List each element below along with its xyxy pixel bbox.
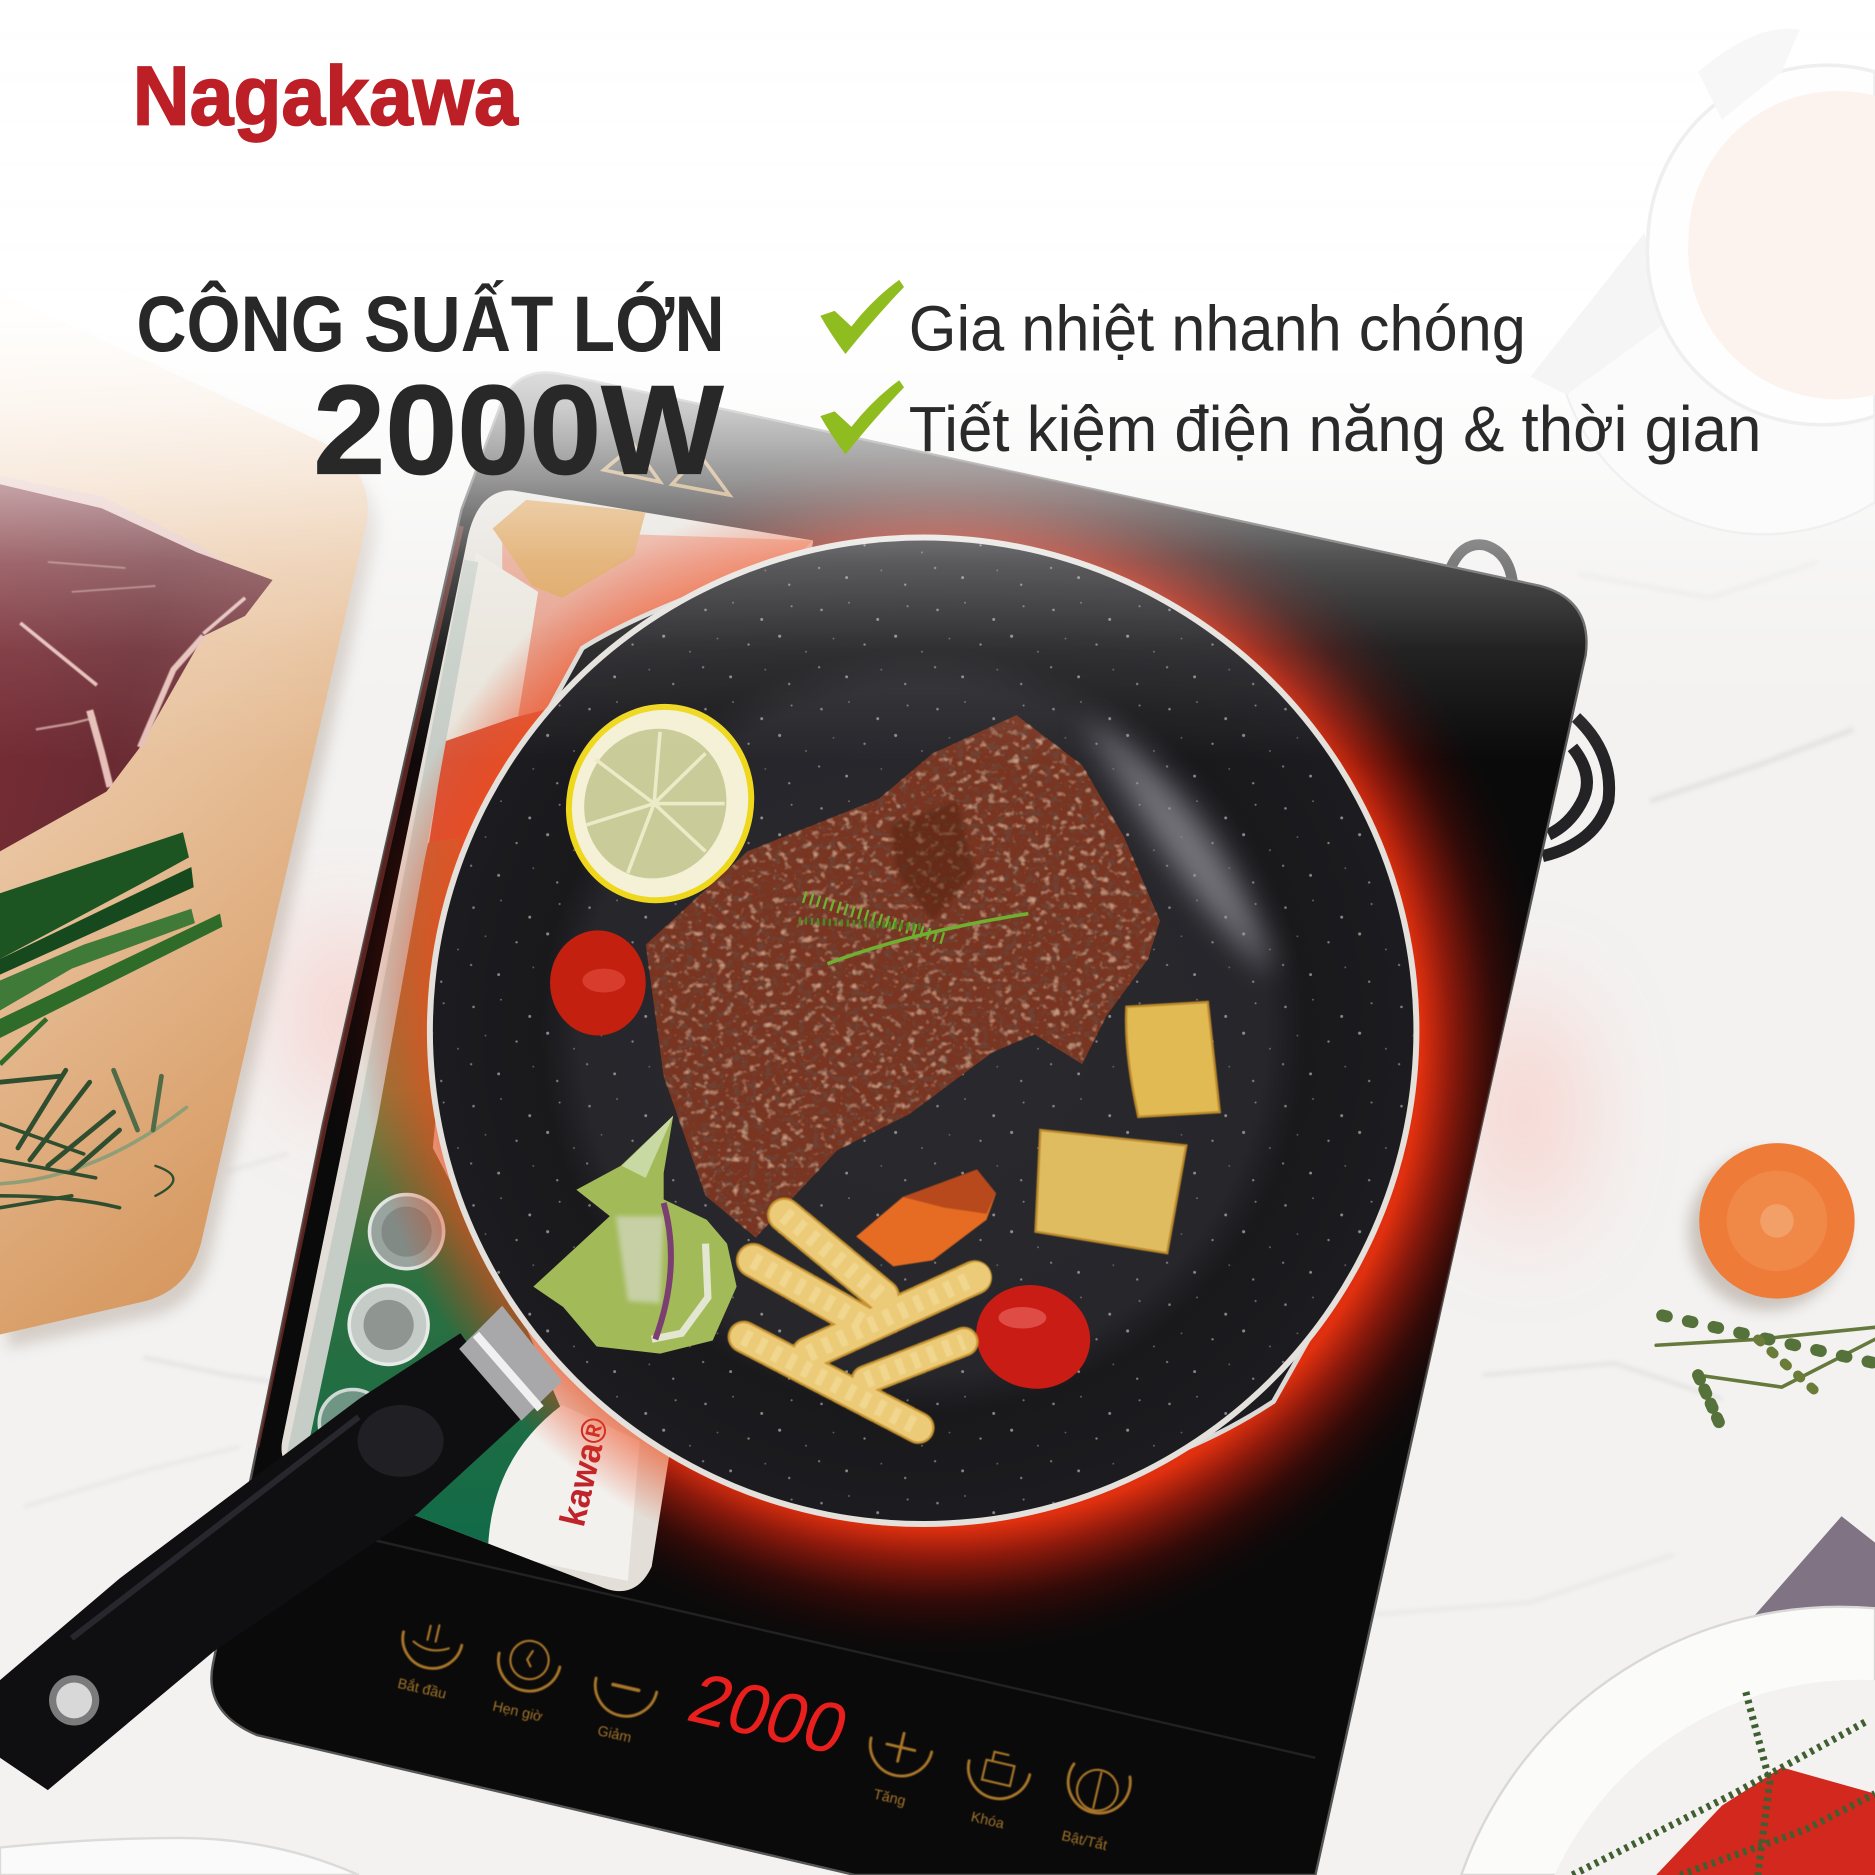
cloth napkin (1740, 1516, 1875, 1632)
control button labels: Giảm (596, 1723, 633, 1746)
control button labels: Hẹn giờ (491, 1699, 544, 1726)
soft red glow on table (304, 921, 1572, 1232)
plate, bottom left (0, 1838, 359, 1875)
warning icons (604, 445, 729, 495)
control button labels: Bắt đầu (396, 1675, 448, 1703)
plate with food, bottom right (1461, 1607, 1875, 1875)
red LED display: 2000 (678, 1660, 859, 1770)
orange squash (493, 500, 646, 598)
salmon (502, 530, 813, 717)
hanging hook (1449, 545, 1513, 584)
potato pieces (1036, 1002, 1220, 1253)
icon: green check (820, 380, 904, 454)
glossy highlight (1082, 717, 1274, 975)
french fries (744, 1215, 976, 1428)
rosemary on board (0, 1070, 187, 1208)
control button icons (397, 1618, 1132, 1819)
cooktop body (211, 373, 1586, 1875)
heading: power (136, 279, 725, 501)
benefit 2 (820, 380, 1761, 465)
logo: Nagakawa: Nagakawa (133, 48, 519, 142)
induction cooktop (211, 373, 1609, 1875)
rim glow over picture (366, 522, 813, 1521)
benefit text: Gia nhiệt nhanh chóng (909, 292, 1526, 364)
pan handle (0, 1306, 562, 1790)
icon: green check (820, 280, 904, 354)
control button labels: Bật/Tắt (1060, 1827, 1109, 1854)
thyme sprig (1656, 1315, 1875, 1429)
control button labels (396, 1675, 1109, 1854)
green onions (0, 832, 222, 1064)
olive to green band (295, 837, 562, 1555)
salad (533, 1116, 737, 1354)
cherry tomato, right (964, 1272, 1102, 1401)
steak (646, 715, 1160, 1238)
cup and saucer (1531, 29, 1875, 534)
control button labels: Tăng (872, 1787, 907, 1810)
control knobs in picture (369, 1195, 444, 1269)
benefit text: Tiết kiệm điện năng & thời gian (909, 393, 1761, 465)
heating glow (257, 435, 1549, 1758)
lemon slice (538, 677, 782, 930)
hanging hole (49, 1675, 99, 1726)
pan body (427, 535, 1419, 1527)
pour spouts (526, 586, 741, 751)
cutting board (0, 293, 377, 1349)
carrot piece (856, 1169, 996, 1266)
benefit 1 (820, 280, 1526, 364)
carrot slice (1688, 1143, 1855, 1311)
cheese blocks (502, 569, 538, 718)
heading line 2: 2000W (313, 359, 724, 501)
rosemary garnish (799, 897, 1028, 964)
cherry tomato, left (550, 930, 646, 1036)
raw beef (0, 476, 273, 851)
maroon strip on left side (257, 526, 462, 1447)
heading line 1: CÔNG SUẤT LỚN (136, 279, 725, 368)
control button labels: Khóa (969, 1809, 1006, 1832)
control panel (396, 1618, 1132, 1854)
brand on picture: kawa® (552, 1414, 616, 1530)
power cable (1543, 717, 1609, 856)
red chili (429, 710, 544, 855)
product picture on glass (275, 484, 825, 1602)
steel collar (459, 1306, 562, 1421)
frying pan (0, 535, 1419, 1790)
